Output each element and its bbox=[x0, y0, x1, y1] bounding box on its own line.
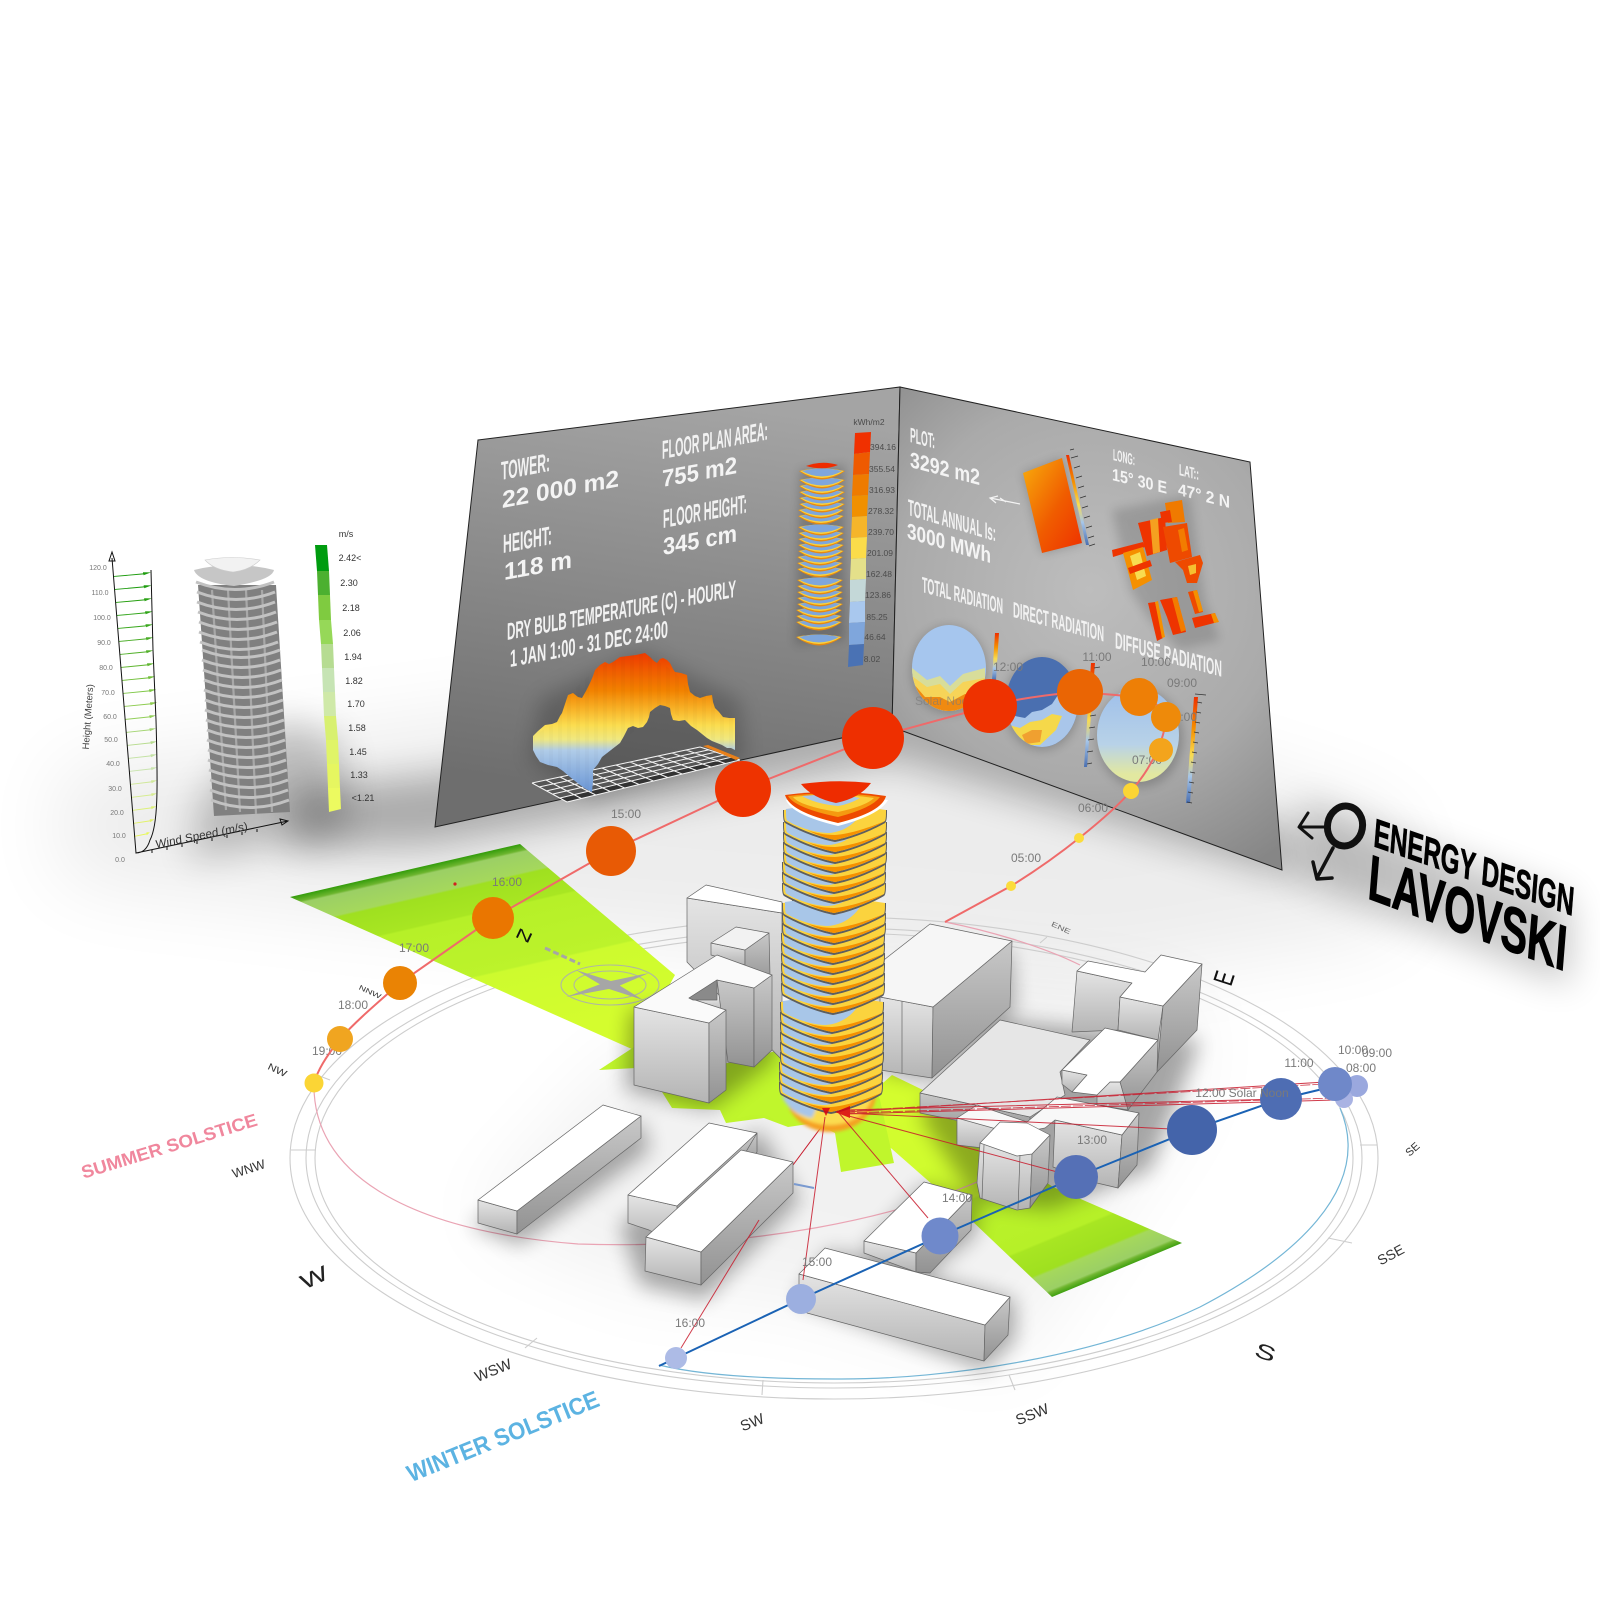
compass direction labels: SSW bbox=[1013, 1400, 1052, 1429]
building: north block behind bbox=[687, 885, 782, 1060]
chart: wind axes and profile curve bbox=[109, 552, 288, 853]
text: summer hours: 16:00 bbox=[492, 875, 522, 889]
text: floor height bbox=[663, 489, 747, 561]
building: long south block bbox=[799, 1248, 1010, 1361]
icon: small wind marker bbox=[794, 1184, 814, 1188]
compass direction labels: NNW bbox=[357, 983, 383, 1001]
building: east mid block bbox=[1062, 1028, 1158, 1110]
winter sun path ground arc bbox=[659, 1108, 1348, 1379]
sun: winter afternoon bbox=[665, 1218, 958, 1369]
legend: wind speed scale: 1.58 bbox=[348, 723, 366, 733]
legend: kWh/m2 scale: 162.48 bbox=[866, 569, 892, 579]
compass direction labels: E bbox=[1208, 967, 1242, 989]
chart: total radiation sphere bbox=[905, 620, 999, 720]
building shadows bbox=[470, 950, 1200, 1370]
compass direction labels: SW bbox=[738, 1410, 767, 1435]
text: summer hours: 09:00 bbox=[1167, 676, 1197, 690]
text: latitude: 47° 2 N bbox=[1178, 479, 1230, 512]
icon: logo ring with arrows bbox=[1299, 803, 1366, 879]
panel: wind profile bbox=[81, 529, 374, 864]
text: height bbox=[503, 520, 572, 586]
panel: left wall with tower data: FLOOR PLAN AREA: bbox=[662, 416, 768, 465]
sun: winter midday bbox=[1054, 1078, 1302, 1199]
icon: plot north arrow bbox=[990, 496, 1020, 504]
text: winter hours: 15:00 bbox=[802, 1255, 832, 1269]
text: height: HEIGHT: bbox=[503, 520, 552, 559]
text: summer hours: 17:00 bbox=[399, 941, 429, 955]
compass direction labels: ENE bbox=[1050, 920, 1072, 936]
text: longitude: LONG: bbox=[1113, 446, 1135, 469]
text: wind height axis: 0.0 bbox=[115, 857, 125, 864]
legend: kWh/m2 scale: 201.09 bbox=[867, 548, 893, 558]
text: latitude bbox=[1178, 461, 1230, 512]
legend: kWh/m2 scale: 85.25 bbox=[866, 612, 888, 622]
legend: kWh/m2 scale: 123.86 bbox=[865, 590, 891, 600]
text: wind height axis: 10.0 bbox=[112, 833, 126, 840]
text: winter hours: 12:00 Solar Noon bbox=[1195, 1086, 1289, 1100]
legend: wind speed scale: <1.21 bbox=[352, 793, 374, 803]
compass direction labels: S bbox=[1252, 1338, 1279, 1367]
logo: Energy Design Lavovski bbox=[1299, 803, 1576, 985]
text: winter hours: 08:00 bbox=[1346, 1061, 1376, 1075]
radiation ray behind block bbox=[793, 1118, 828, 1165]
chart: mini tower radiation bbox=[795, 463, 845, 646]
text: summer hours: Solar Noon bbox=[915, 694, 975, 708]
text: total annual Is: 3000 MWh bbox=[907, 518, 991, 568]
panel: right wall with site data: DIRECT RADIATION bbox=[1013, 597, 1104, 646]
legend: wind speed scale: 2.42< bbox=[339, 553, 361, 563]
text: summer hours: 08:00 bbox=[1167, 710, 1197, 724]
text: summer solstice: SUMMER SOLSTICE bbox=[79, 1110, 260, 1183]
panel: right wall with site data: TOTAL RADIATION bbox=[922, 572, 1003, 619]
text: wind height axis: Height (Meters) bbox=[81, 684, 96, 750]
text: wind height axis: 20.0 bbox=[110, 810, 124, 817]
winter sun path bbox=[659, 1043, 1392, 1369]
panel: right wall with site data bbox=[892, 387, 1282, 870]
legend: wind speed scale: 2.06 bbox=[343, 628, 361, 638]
legend: wind speed scale: m/s bbox=[339, 529, 354, 539]
tower: structural grey model bbox=[194, 558, 290, 816]
legend: wind speed scale: 1.33 bbox=[350, 770, 368, 780]
legend: wind speed scale: 1.94 bbox=[344, 652, 362, 662]
text: height: 118 m bbox=[504, 547, 572, 586]
text: winter hours: 13:00 bbox=[1077, 1133, 1107, 1147]
panel: right wall with site data: DIFFUSE RADIATION bbox=[1115, 627, 1222, 682]
building: low podium bbox=[920, 1020, 1090, 1135]
chart: site plot radiation bbox=[1023, 449, 1095, 553]
text: dry bulb heading: 1 JAN 1:00 - 31 DEC 24:00 bbox=[510, 616, 668, 673]
compass direction labels: W bbox=[297, 1262, 333, 1294]
panel: left wall with tower data bbox=[435, 387, 900, 827]
text: wind height axis: 110.0 bbox=[92, 590, 109, 597]
text: tower area bbox=[501, 447, 619, 514]
compass direction labels: N bbox=[513, 925, 535, 947]
sun: winter morning bbox=[1318, 1067, 1368, 1108]
compass direction labels bbox=[230, 920, 1422, 1435]
text: longitude: 15° 30 E bbox=[1112, 464, 1167, 498]
chart: neighbourhood roof radiation bbox=[1112, 495, 1220, 650]
text: wind height axis: 70.0 bbox=[101, 690, 115, 697]
text: tower area: TOWER: bbox=[501, 447, 550, 486]
chart: dry bulb temperature surface bbox=[530, 650, 745, 802]
text: floor plan area: 755 m2 bbox=[662, 452, 737, 493]
text: wind height axis: 100.0 bbox=[93, 615, 111, 622]
text: summer hours: 19:00 bbox=[312, 1044, 342, 1058]
legend: wind speed scale: 1.45 bbox=[349, 747, 367, 757]
wind rose: star around tower base bbox=[599, 1047, 894, 1172]
text: winter hours bbox=[675, 1043, 1392, 1330]
compass direction labels: WNW bbox=[230, 1156, 268, 1181]
text: summer hours: 15:00 bbox=[611, 807, 641, 821]
legend: kWh/m2 scale: kWh/m2 bbox=[853, 417, 885, 427]
text: summer hours bbox=[312, 650, 1197, 1058]
chart: direct radiation sphere bbox=[1000, 650, 1100, 767]
text: wind height axis bbox=[81, 565, 126, 864]
text: winter hours: 16:00 bbox=[675, 1316, 705, 1330]
wind rose: south-east wedge bbox=[850, 1075, 1182, 1297]
legend: wind speed scale: 1.70 bbox=[347, 699, 365, 709]
text: wind height axis: 30.0 bbox=[108, 786, 122, 793]
text: plot bbox=[910, 423, 980, 490]
radiation rays to winter sun bbox=[681, 1082, 1335, 1348]
legend: kWh/m2 scale: 46.64 bbox=[864, 632, 886, 642]
text: summer hours: 10:00 bbox=[1141, 655, 1171, 669]
panel: right wall with site data: TOTAL ANNUAL Is: bbox=[908, 494, 996, 546]
building: block east of tower bbox=[880, 924, 1012, 1078]
sun: 15:00 to 19:00 bbox=[304, 826, 636, 1092]
text: winter hours: 09:00 bbox=[1362, 1046, 1392, 1060]
summer sun path bbox=[304, 650, 1197, 1092]
sun: 09:00 to 11:00 bbox=[1057, 669, 1181, 732]
text: floor plan area bbox=[662, 416, 768, 493]
building: bar west far bbox=[478, 1105, 641, 1234]
text: wind height axis: 40.0 bbox=[106, 761, 120, 768]
text: tower area: 22 000 m2 bbox=[502, 466, 619, 514]
building: south-east L block bbox=[957, 1097, 1139, 1188]
summer night path arc bbox=[314, 922, 1080, 1245]
text: dry bulb heading bbox=[507, 576, 736, 673]
text: wind speed axis: Wind Speed (m/s) bbox=[155, 820, 248, 851]
text: summer hours: 06:00 bbox=[1078, 801, 1108, 815]
legend: wind speed scale: 2.18 bbox=[342, 603, 360, 613]
legend: wind speed scale: 1.82 bbox=[345, 676, 363, 686]
text: wind height axis: 80.0 bbox=[99, 665, 113, 672]
tower: radiation model bbox=[779, 781, 888, 1132]
text: floor height: 345 cm bbox=[663, 520, 737, 561]
legend: kWh/m2 scale: 8.02 bbox=[864, 654, 881, 664]
compass rings bbox=[290, 917, 1378, 1399]
legend: wind speed scale bbox=[315, 529, 374, 812]
compass direction labels: NW bbox=[266, 1062, 289, 1080]
sun: 05:00 to 08:00 bbox=[1006, 738, 1173, 891]
building: bar south-west behind bbox=[628, 1123, 757, 1245]
text: winter hours: 11:00 bbox=[1284, 1056, 1314, 1070]
text: winter hours: 14:00 bbox=[942, 1191, 972, 1205]
compass rose graphic bbox=[453, 882, 659, 1005]
compass direction labels: SE bbox=[1404, 1140, 1422, 1159]
text: winter solstice: WINTER SOLSTICE bbox=[403, 1386, 603, 1488]
text: summer hours: 12:00 bbox=[993, 660, 1023, 674]
legend: kWh/m2 scale: 316.93 bbox=[869, 485, 895, 495]
legend: kWh/m2 scale: 394.16 bbox=[870, 442, 896, 452]
sun: 12:00 to 14:00 bbox=[715, 679, 1017, 817]
legend: kWh/m2 scale bbox=[848, 417, 896, 667]
text: summer hours: 05:00 bbox=[1011, 851, 1041, 865]
building: far east L block bbox=[1072, 955, 1202, 1072]
wind rose: north-west wedge bbox=[290, 844, 675, 1050]
text: latitude: LAT:: bbox=[1179, 461, 1199, 484]
text: summer hours: 18:00 bbox=[338, 998, 368, 1012]
panel: left wall with tower data: DRY BULB TEMPERATURE (C) - HOURLY bbox=[507, 576, 736, 646]
compass direction labels: WSW bbox=[472, 1355, 515, 1386]
legend: kWh/m2 scale: 278.32 bbox=[868, 506, 894, 516]
text: summer hours: 07:00 bbox=[1132, 753, 1162, 767]
text: winter hours: 10:00 bbox=[1338, 1043, 1368, 1057]
ground shadows bbox=[60, 660, 1570, 1370]
legend: kWh/m2 scale: 239.70 bbox=[868, 527, 894, 537]
text: wind height axis: 60.0 bbox=[103, 714, 117, 721]
text: summer hours: 11:00 bbox=[1082, 650, 1112, 664]
text: wind height axis: 90.0 bbox=[97, 640, 111, 647]
text: plot: 3292 m2 bbox=[910, 447, 980, 490]
building: west L block bbox=[634, 927, 772, 1103]
text: total annual Is bbox=[907, 494, 996, 568]
compass direction labels: SSE bbox=[1375, 1241, 1407, 1268]
text: wind height axis: 50.0 bbox=[104, 737, 118, 744]
text: plot: PLOT: bbox=[910, 423, 935, 453]
text: wind height axis: 120.0 bbox=[89, 565, 107, 572]
building: south small block bbox=[864, 1182, 972, 1273]
legend: wind speed scale: 2.30 bbox=[340, 578, 358, 588]
text: longitude bbox=[1112, 446, 1167, 498]
tower base ring bbox=[782, 1096, 876, 1132]
legend: kWh/m2 scale: 355.54 bbox=[869, 464, 895, 474]
chart: diffuse radiation sphere bbox=[1097, 688, 1206, 803]
building: bar south-west front bbox=[645, 1150, 793, 1285]
building: rounded block bbox=[977, 1122, 1050, 1210]
chart: wind arrows bbox=[114, 572, 157, 837]
panel: left wall with tower data: FLOOR HEIGHT: bbox=[663, 489, 747, 534]
